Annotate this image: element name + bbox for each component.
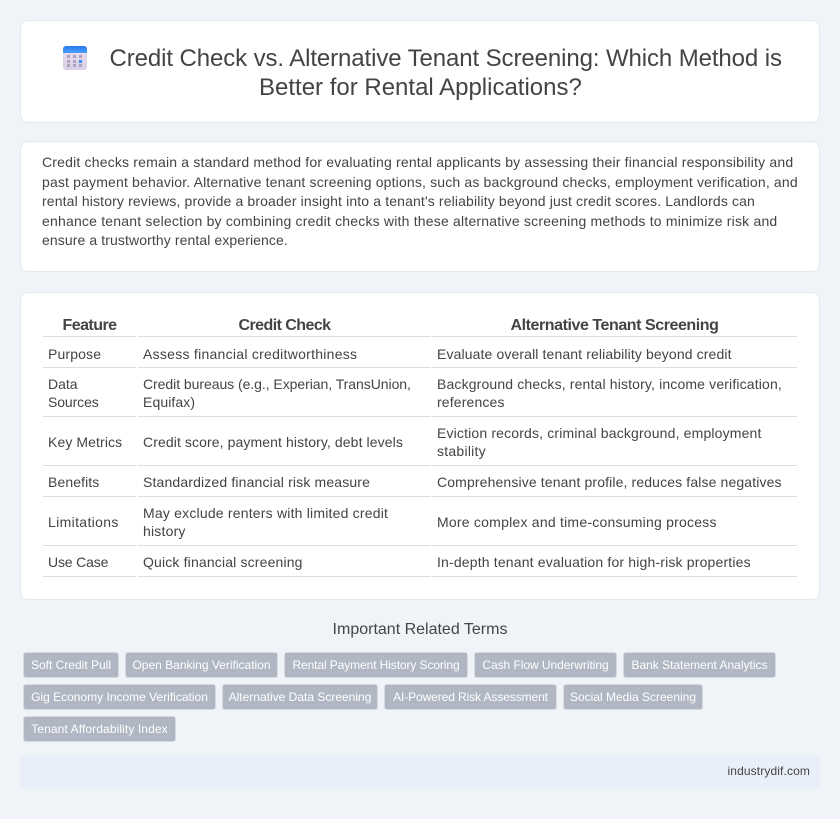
tag: Cash Flow Underwriting <box>482 658 609 672</box>
tag list: related terms <box>23 652 776 742</box>
row: benefits: Standardized financial risk measure <box>143 474 370 490</box>
title <box>110 45 782 101</box>
tag <box>23 716 176 742</box>
row: data sources: Equifax) <box>143 394 195 410</box>
tag: Tenant Affordability Index <box>31 722 168 736</box>
row: key metrics: stability <box>437 443 486 459</box>
tag <box>23 652 119 678</box>
row: data sources: Credit bureaus (e.g., Experian, TransUnion, <box>143 376 411 392</box>
tag: Bank Statement Analytics <box>631 658 768 672</box>
panel: title card <box>20 20 820 123</box>
footer bar <box>20 755 820 789</box>
panel: comparison table <box>20 292 820 600</box>
row: limitations: More complex and time-consuming process <box>437 514 717 530</box>
tag: Soft Credit Pull <box>31 658 111 672</box>
tag <box>284 652 468 678</box>
row: limitations: May exclude renters with limited credit <box>143 505 388 521</box>
table header: Alternative Tenant Screening <box>511 317 718 334</box>
icon: calendar <box>63 46 87 70</box>
table header <box>63 317 718 334</box>
panel: introduction <box>20 141 820 272</box>
tag: Rental Payment History Scoring <box>292 658 460 672</box>
text block: introduction: Credit checks remain a standard method for evaluating rental applicants by assessing their financial responsibility and <box>42 154 793 170</box>
row: purpose: Assess financial creditworthiness <box>143 346 357 362</box>
table header: Credit Check <box>238 317 331 334</box>
tag <box>125 652 278 678</box>
row: benefits: Comprehensive tenant profile, reduces false negatives <box>437 474 782 490</box>
row: limitations <box>48 505 717 539</box>
tag: Social Media Screening <box>570 690 696 704</box>
row: use case: In-depth tenant evaluation for high-risk properties <box>437 554 751 570</box>
text block: introduction: ensure a trustworthy rental experience. <box>42 232 288 248</box>
text block: introduction: enhance tenant selection by combining credit checks with these alternative screening methods to minimize risk and <box>42 213 777 229</box>
row: key metrics: Eviction records, criminal background, employment <box>437 425 762 441</box>
text block: introduction: past payment behavior. Alternative tenant screening options, such as background checks, employment verification, and <box>42 174 798 190</box>
tag <box>623 652 776 678</box>
row: purpose <box>48 346 732 362</box>
row: limitations: history <box>143 523 186 539</box>
title: Credit Check vs. Alternative Tenant Screening: Which Method is <box>110 45 782 72</box>
row: use case: Use Case <box>48 554 108 570</box>
row: use case <box>48 554 751 570</box>
heading: important related terms: Important Related Terms <box>333 621 507 638</box>
table header: Feature <box>63 317 116 334</box>
row: key metrics <box>48 425 762 459</box>
tag: Gig Economy Income Verification <box>31 690 208 704</box>
row: use case: Quick financial screening <box>143 554 303 570</box>
row: key metrics: Credit score, payment history, debt levels <box>143 434 403 450</box>
tag <box>474 652 617 678</box>
row: purpose: Purpose <box>48 346 101 362</box>
text block: introduction <box>42 154 798 248</box>
row: key metrics: Key Metrics <box>48 434 122 450</box>
title: Better for Rental Applications? <box>259 74 582 101</box>
text block: introduction: rental history reviews, provide a broader insight into a tenant's reliability beyond just credit scores. Landlords can <box>42 193 755 209</box>
row: benefits <box>48 474 782 490</box>
row: data sources: Sources <box>48 394 99 410</box>
row: limitations: Limitations <box>48 514 119 530</box>
tag <box>563 684 703 710</box>
row: purpose: Evaluate overall tenant reliability beyond credit <box>437 346 732 362</box>
row: data sources <box>48 376 782 410</box>
tag: Open Banking Verification <box>132 658 271 672</box>
tag: Alternative Data Screening <box>229 690 371 704</box>
tag: AI-Powered Risk Assessment <box>393 690 548 704</box>
tag <box>23 684 216 710</box>
row: benefits: Benefits <box>48 474 99 490</box>
tag <box>222 684 378 710</box>
footer source: industrydif.com <box>728 764 810 778</box>
tag <box>384 684 557 710</box>
row: data sources: Data <box>48 376 78 392</box>
row: data sources: references <box>437 394 505 410</box>
row: data sources: Background checks, rental history, income verification, <box>437 376 782 392</box>
